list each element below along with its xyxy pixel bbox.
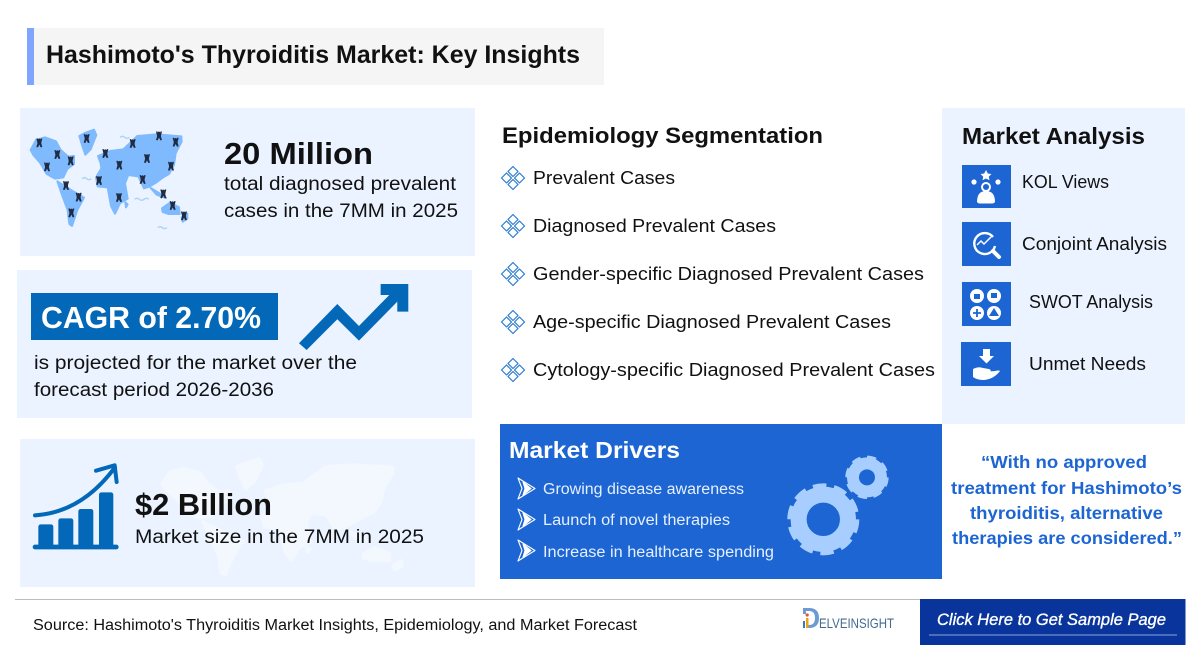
stat: CAGR of 2.70% <box>31 293 278 340</box>
text: prevalent cases description: total diagnosed prevalent <box>224 174 457 195</box>
item: diagnosed prevalent cases: Diagnosed Prevalent Cases <box>533 215 776 236</box>
quote <box>951 452 1187 548</box>
quote: thyroiditis, alternative <box>970 503 1163 523</box>
logo: DelveInsight <box>803 608 894 631</box>
quote: treatment for Hashimoto’s <box>951 478 1182 498</box>
text: prevalent cases description: cases in the 7MM in 2025 <box>224 201 458 222</box>
label: conjoint analysis: Conjoint Analysis <box>1022 234 1167 254</box>
icon: gears <box>790 458 887 553</box>
heading: market analysis: Market Analysis <box>962 123 1145 149</box>
driver: increase in healthcare spending: Increase in healthcare spending <box>543 544 774 561</box>
button: get sample page: Click Here to Get Sample Page <box>937 610 1166 629</box>
text: market size description: Market size in the 7MM in 2025 <box>135 527 424 548</box>
text: CAGR description: is projected for the market over the <box>34 353 357 374</box>
driver: launch of novel therapies <box>518 509 730 530</box>
stat: $2 Billion: $2 Billion <box>135 487 272 522</box>
title banner <box>27 28 604 85</box>
item: prevalent cases: Prevalent Cases <box>533 167 675 188</box>
item: cytology-specific: Cytology-specific Diagnosed Prevalent Cases <box>533 359 935 380</box>
panel: market analysis <box>942 108 1185 424</box>
item: gender-specific: Gender-specific Diagnosed Prevalent Cases <box>533 263 924 284</box>
icon: conjoint analysis <box>962 222 1011 266</box>
icon: growth bar chart <box>33 465 119 549</box>
button: get sample page <box>920 599 1186 645</box>
driver: launch of novel therapies: Launch of novel therapies <box>543 512 730 529</box>
driver: growing disease awareness <box>518 478 744 499</box>
label: unmet needs: Unmet Needs <box>1029 354 1146 374</box>
panel: CAGR <box>17 270 472 418</box>
panel: 20 million prevalent cases <box>20 108 475 256</box>
text: CAGR description: forecast period 2026-2036 <box>34 380 274 401</box>
title banner: Hashimoto's Thyroiditis Market: Key Insights <box>46 41 580 69</box>
label: SWOT analysis: SWOT Analysis <box>1029 292 1153 312</box>
panel: market drivers <box>500 424 942 579</box>
icon: SWOT analysis <box>962 282 1011 326</box>
panel: epidemiology segmentation <box>502 123 935 382</box>
driver: growing disease awareness: Growing disease awareness <box>543 481 744 498</box>
driver: increase in healthcare spending <box>518 540 774 561</box>
heading: market drivers: Market Drivers <box>509 437 680 463</box>
label: KOL views: KOL Views <box>1022 172 1109 192</box>
quote: therapies are considered.” <box>952 528 1182 548</box>
item: age-specific: Age-specific Diagnosed Prevalent Cases <box>533 311 891 332</box>
stat: CAGR of 2.70%: CAGR of 2.70% <box>41 300 261 335</box>
source: Source: Hashimoto's Thyroiditis Market Insights, Epidemiology, and Market Forecast <box>33 617 638 634</box>
icon: rising arrow <box>299 284 408 350</box>
faint world map background <box>162 459 402 575</box>
logo: DelveInsight: ELVEINSIGHT <box>819 615 894 631</box>
panel: market size <box>20 439 475 587</box>
stat: 20 Million: 20 Million <box>224 136 373 171</box>
icon: KOL views <box>962 165 1011 208</box>
heading: epidemiology segmentation: Epidemiology Segmentation <box>502 123 823 148</box>
quote: “With no approved <box>981 452 1147 472</box>
footer <box>15 599 1186 645</box>
icon: unmet needs <box>961 342 1011 386</box>
icon: world map with people <box>31 130 187 229</box>
